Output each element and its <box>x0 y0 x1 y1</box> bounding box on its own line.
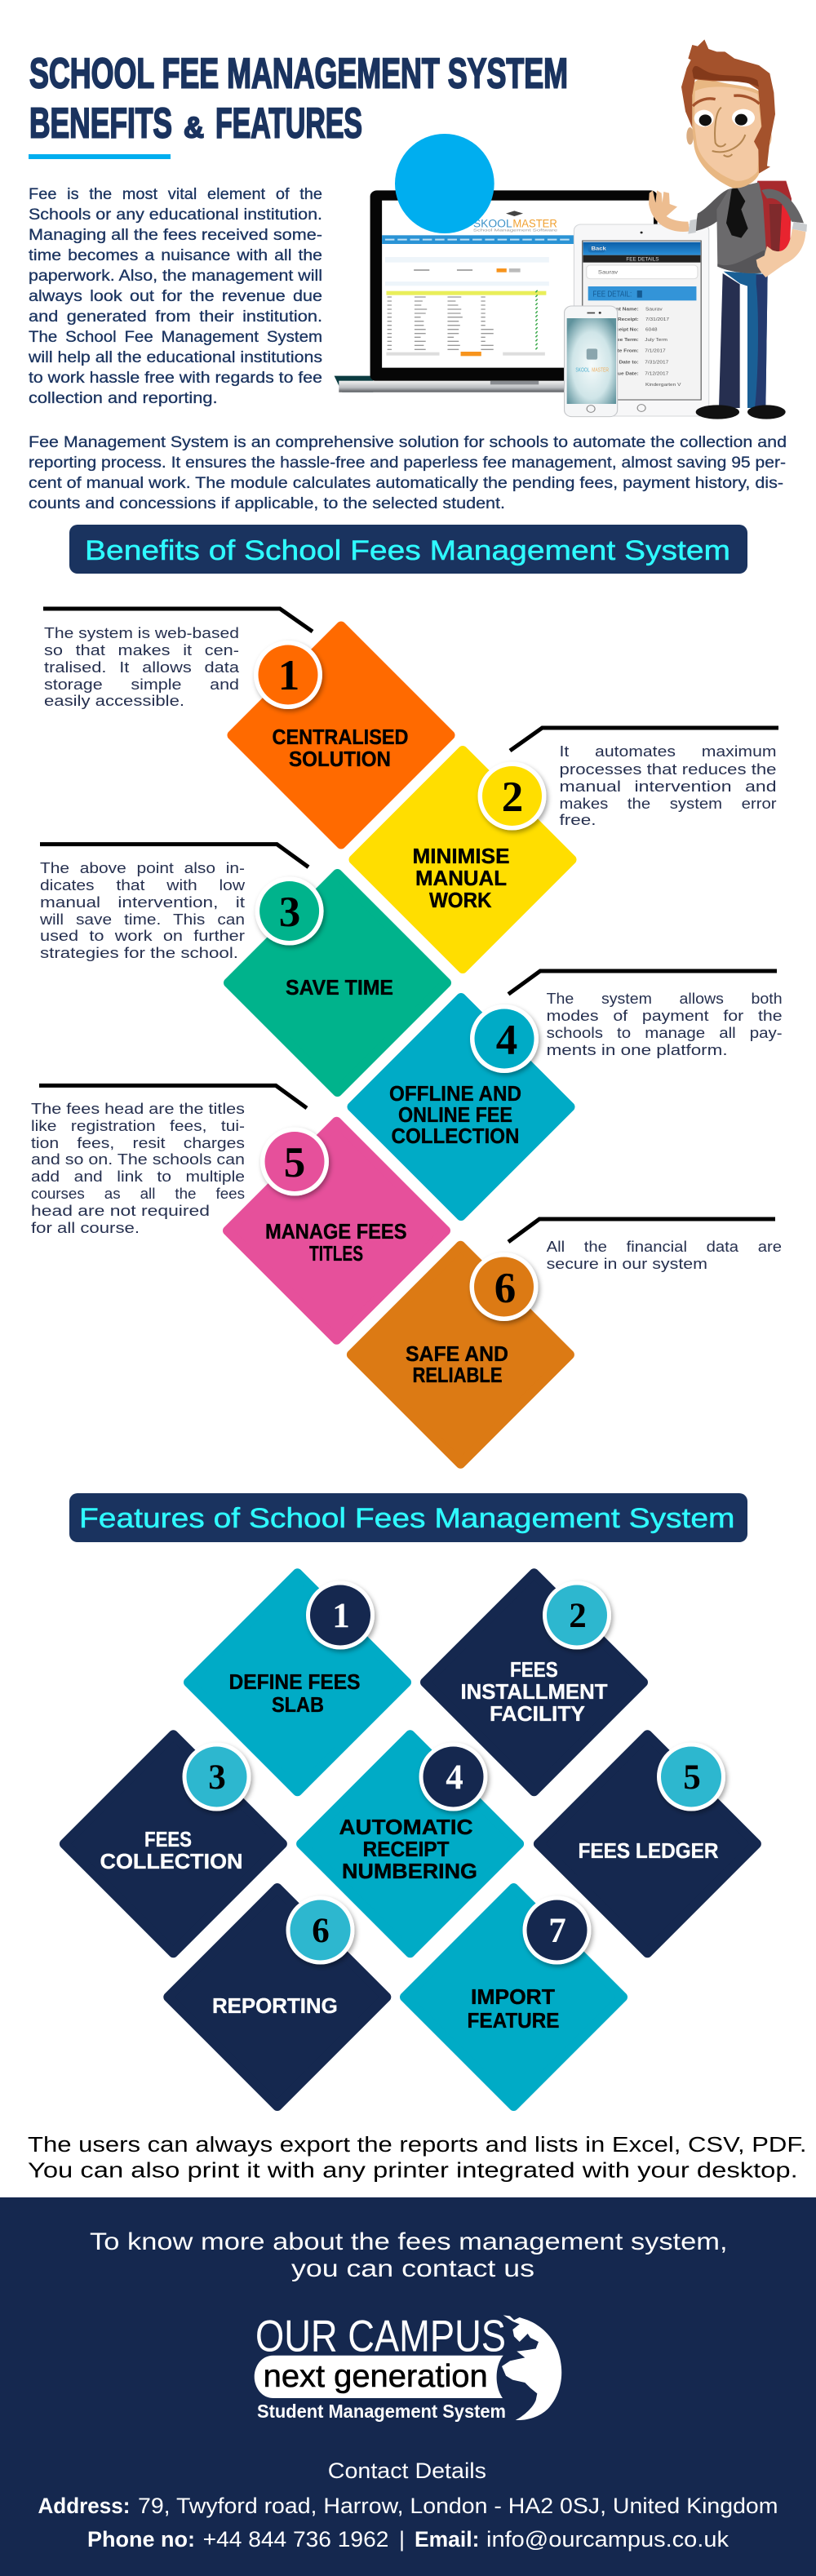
right arm <box>761 189 804 223</box>
footer call to action <box>90 2228 728 2282</box>
diamond 2 <box>354 751 571 969</box>
title <box>29 51 568 147</box>
feature badge 6: 6 <box>312 1912 330 1950</box>
contact details <box>38 2459 778 2552</box>
feature diamond 4 <box>301 1735 519 1953</box>
tablet: Back <box>591 246 606 252</box>
callout text 1: tralised. It allows data <box>44 659 240 676</box>
tablet detail rows: 7/12/2017 <box>645 371 669 376</box>
label 2: MINIMISE <box>413 845 509 868</box>
feature diamond 6 <box>168 1888 386 2106</box>
callout text 4: ments in one platform. <box>547 1042 728 1058</box>
benefit 5 <box>31 1085 446 1340</box>
callout text 4 <box>547 991 783 1058</box>
torso <box>716 182 768 273</box>
diamond 6 <box>352 1246 570 1464</box>
label 5: MANAGE FEES <box>265 1221 406 1244</box>
tablet detail rows: 7/31/2017 <box>645 317 670 322</box>
feature diamond 3 <box>64 1735 282 1953</box>
tablet detail rows: Date to: <box>619 360 639 366</box>
logo: our campus <box>255 2312 561 2422</box>
callout text 3: used to work on further <box>40 928 245 944</box>
label 3: SAVE TIME <box>286 977 393 1000</box>
feature badge 7 <box>522 1896 591 1965</box>
badge 3 <box>255 876 324 945</box>
benefit 2 <box>354 728 778 969</box>
feature 7 <box>405 1888 623 2106</box>
feature label 4: AUTOMATIC <box>339 1816 473 1839</box>
badge 5 <box>260 1128 329 1196</box>
hand on hip <box>756 229 805 277</box>
feature label 7: IMPORT <box>471 1986 555 2009</box>
feature diamond 1 <box>188 1573 406 1791</box>
diamond 4 <box>353 998 570 1216</box>
callout leader 2 <box>510 728 778 751</box>
callout text 3: will save time. This can <box>39 911 245 928</box>
tablet: FEE DETAIL: <box>592 290 632 299</box>
title: FEATURES <box>215 100 362 147</box>
intro paragraph: always look out for the revenue due <box>29 287 322 305</box>
feature badge 5 <box>657 1743 725 1811</box>
feature label 1: SLAB <box>272 1694 324 1717</box>
export note: You can also print it with any printer integrated with your desktop. <box>28 2159 798 2182</box>
phone <box>565 306 618 417</box>
laptop screen logo: School Management Software <box>473 228 557 233</box>
waving hand and forearm <box>649 190 690 232</box>
contact details: Phone no: <box>87 2527 195 2552</box>
feature label 6: REPORTING <box>212 1995 338 2018</box>
badge 2 <box>478 762 547 831</box>
feature label 7 <box>467 1986 560 2033</box>
label 4: OFFLINE AND <box>389 1083 521 1106</box>
benefit 6 <box>352 1219 782 1464</box>
badge 1 <box>254 641 322 709</box>
brows, nose and smile <box>693 95 760 106</box>
contact details: Contact Details <box>328 2459 486 2483</box>
export note: The users can always export the reports and lists in Excel, CSV, PDF. <box>28 2134 807 2157</box>
laptop data table <box>388 297 494 349</box>
feature badge 3 <box>183 1743 251 1811</box>
heading: benefits: Benefits of School Fees Management System <box>85 535 730 566</box>
feature 1 <box>188 1573 406 1791</box>
heading: benefits <box>69 525 747 574</box>
feature badge 1: 1 <box>332 1597 350 1635</box>
callout leader 4 <box>508 971 777 994</box>
feature badge 7: 7 <box>548 1912 566 1950</box>
tablet <box>574 224 709 416</box>
callout text 6: secure in our system <box>547 1256 707 1272</box>
shoes <box>695 405 787 419</box>
callout text 4: The system allows both <box>547 991 783 1007</box>
intro paragraph: to work hassle free with regards to fee <box>29 369 322 387</box>
label 1: CENTRALISED <box>273 726 408 749</box>
title underline <box>29 154 171 159</box>
intro paragraph: Schools or any educational institution. <box>29 206 322 224</box>
callout text 3: manual intervention, it <box>40 894 245 911</box>
tablet detail rows: eceipt No: <box>613 327 639 333</box>
feature badge 3: 3 <box>208 1758 226 1797</box>
badge 4 <box>470 1004 539 1073</box>
badge 1: 1 <box>278 652 299 699</box>
heading: features <box>69 1493 747 1542</box>
face <box>692 79 763 188</box>
label 1: SOLUTION <box>289 748 391 771</box>
intro paragraph: time becomes a nuisance with all the <box>29 246 322 264</box>
logo globe <box>502 2315 561 2420</box>
feature 5 <box>539 1735 756 1953</box>
feature badge 2 <box>543 1581 611 1650</box>
contact details: 79, Twyford road, Harrow, London - HA2 0SJ, United Kingdom <box>138 2494 778 2518</box>
badge 6 <box>470 1253 539 1321</box>
phone: SKOOL <box>575 366 590 374</box>
title: & <box>184 110 204 144</box>
callout text 4: schools to manage all pay- <box>547 1025 783 1041</box>
tablet detail rows: 7/1/2017 <box>645 348 666 354</box>
intro paragraph: will help all the educational institutions <box>28 348 322 366</box>
feature diamond 5 <box>539 1735 756 1953</box>
callout leader 1 <box>43 609 313 632</box>
feature label 3 <box>100 1829 243 1873</box>
benefit 3 <box>39 845 446 1092</box>
footer panel <box>0 2197 816 2576</box>
feature label 4: NUMBERING <box>342 1860 477 1883</box>
logo: our campus: next generation <box>264 2359 488 2394</box>
feature badge 6 <box>286 1896 354 1965</box>
feature badge 4: 4 <box>446 1758 463 1797</box>
contact details: +44 844 736 1962 <box>203 2527 388 2552</box>
callout text 1: The system is web-based <box>44 625 239 641</box>
label 4: COLLECTION <box>392 1125 519 1148</box>
intro paragraph: collection and reporting. <box>29 389 218 407</box>
callout text 1: storage simple and <box>44 676 239 693</box>
sleeve <box>695 189 729 231</box>
hair <box>681 39 775 174</box>
feature label 3: FEES <box>144 1829 192 1851</box>
hero illustration <box>335 39 807 419</box>
feature badge 1 <box>306 1581 375 1650</box>
callout leader 3 <box>40 845 308 867</box>
feature label 7: FEATURE <box>467 2010 560 2033</box>
feature badge 2: 2 <box>569 1597 587 1635</box>
title: SCHOOL FEE MANAGEMENT SYSTEM <box>29 51 568 98</box>
label 4 <box>389 1083 521 1148</box>
laptop <box>335 190 658 392</box>
description paragraph: Fee Management System is an comprehensive solution for schools to automate the collection and <box>29 433 787 451</box>
callout text 1: so that makes it cen- <box>44 642 239 658</box>
label 6: SAFE AND <box>406 1343 508 1366</box>
blue circle <box>395 134 494 233</box>
tablet detail rows: Fee Term: <box>614 337 639 343</box>
label 6 <box>406 1343 508 1387</box>
callout text 6 <box>547 1239 782 1272</box>
heading: features: Features of School Fees Management System <box>79 1503 734 1534</box>
feature label 2 <box>460 1659 608 1726</box>
callout text 5: add and link to multiple <box>31 1168 245 1185</box>
callout text 2: manual intervention and <box>560 778 777 795</box>
contact details: info@ourcampus.co.uk <box>486 2527 730 2552</box>
label 5 <box>265 1221 406 1266</box>
logo: our campus: Student Management System <box>257 2401 506 2422</box>
callout text 2 <box>560 743 777 828</box>
callout text 5: and so on. The schools can <box>31 1151 245 1168</box>
label 5: TITLES <box>309 1243 363 1266</box>
laptop screen logo <box>473 211 557 233</box>
footer call to action: To know more about the fees management system, <box>90 2228 728 2255</box>
description paragraph: cent of manual work. The module calculates automatically the pending fees, payment history, dis- <box>29 474 783 492</box>
callout text 5: courses as all the fees <box>31 1186 245 1202</box>
title: BENEFITS <box>29 100 172 147</box>
intro paragraph: paperwork. Also, the management will <box>29 267 322 285</box>
tablet detail rows: Saurav <box>645 307 663 313</box>
tablet detail rows: Due Date: <box>614 371 639 376</box>
feature diamond 7 <box>405 1888 623 2106</box>
benefit 4 <box>353 971 783 1216</box>
label 2 <box>413 845 509 912</box>
callout text 1: easily accessible. <box>44 693 184 709</box>
intro paragraph: Managing all the fees received some- <box>29 226 322 244</box>
callout text 5: head are not required <box>31 1203 210 1219</box>
tablet: Saurav <box>598 269 619 276</box>
tablet detail rows: dent Name: <box>610 307 639 313</box>
laptop screen logo: SKOOL <box>473 217 512 230</box>
tablet detail rows: of Receipt: <box>611 317 639 322</box>
callout text 3: The above point also in- <box>40 860 245 876</box>
description paragraph: reporting process. It ensures the hassle-free and paperless fee management, almost saving 95 per- <box>29 454 786 472</box>
export note <box>28 2134 807 2182</box>
tablet detail rows: 7/31/2017 <box>645 360 669 366</box>
badge 5: 5 <box>284 1139 305 1186</box>
feature label 1: DEFINE FEES <box>228 1671 361 1694</box>
eyes <box>694 109 755 126</box>
logo: our campus: OUR CAMPUS <box>255 2312 506 2361</box>
logo pill <box>255 2356 503 2398</box>
feature badge 4 <box>419 1743 488 1811</box>
tablet detail rows: Date From: <box>610 348 639 354</box>
intro paragraph: The School Fee Management System <box>29 328 322 346</box>
label 2: MANUAL <box>415 867 507 890</box>
description paragraph <box>29 433 787 512</box>
footer call to action: you can contact us <box>291 2255 534 2282</box>
tablet detail rows: July Term <box>645 337 667 343</box>
badge 6: 6 <box>494 1265 516 1312</box>
callout text 3: strategies for the school. <box>40 945 238 961</box>
label 1 <box>273 726 408 771</box>
diamond 5 <box>228 1122 446 1340</box>
feature label 2: FACILITY <box>490 1703 585 1726</box>
callout text 5: like registration fees, tui- <box>31 1118 245 1134</box>
badge 3: 3 <box>279 889 300 936</box>
intro paragraph <box>28 185 322 407</box>
feature diamond 2 <box>425 1573 643 1791</box>
callout text 5: tion fees, resit charges <box>31 1135 245 1151</box>
contact details: Email: <box>415 2527 479 2552</box>
callout text 4: modes of payment for the <box>547 1008 783 1024</box>
callout text 5 <box>31 1101 245 1236</box>
tie <box>726 188 748 238</box>
diamond 3 <box>228 874 446 1092</box>
feature 2 <box>425 1573 643 1791</box>
legs <box>719 272 768 408</box>
character <box>649 39 807 419</box>
tablet detail rows: 6048 <box>645 327 658 333</box>
tablet detail rows: Kindergarten V <box>645 382 681 388</box>
contact details: | <box>399 2527 405 2552</box>
contact details: Address: <box>38 2494 130 2518</box>
intro paragraph: Fee is the most vital element of the <box>29 185 322 203</box>
phone: MASTER <box>592 366 609 374</box>
feature label 4 <box>339 1816 477 1883</box>
feature label 2: FEES <box>510 1659 558 1682</box>
tablet detail rows <box>610 307 681 388</box>
callout text 2: free. <box>560 812 596 828</box>
ears <box>686 126 772 149</box>
feature label 1 <box>228 1671 361 1717</box>
callout text 6: All the financial data are <box>547 1239 782 1255</box>
callout text 2: makes the system error <box>560 796 777 812</box>
feature label 3: COLLECTION <box>100 1851 243 1873</box>
callout text 2: processes that reduces the <box>560 761 777 778</box>
callout text 3 <box>39 860 246 961</box>
label 2: WORK <box>429 889 492 912</box>
feature label 2: INSTALLMENT <box>460 1681 608 1704</box>
feature 6 <box>168 1888 386 2106</box>
backpack <box>753 181 792 255</box>
feature 4 <box>301 1735 519 1953</box>
feature 3 <box>64 1735 282 1953</box>
callout leader 5 <box>39 1085 307 1108</box>
callout leader 6 <box>508 1219 775 1242</box>
feature label 4: RECEIPT <box>362 1838 450 1861</box>
callout text 5: The fees head are the titles <box>31 1101 245 1117</box>
intro paragraph: and generated from their institution. <box>29 308 322 326</box>
benefit 1 <box>43 609 450 844</box>
description paragraph: counts and concessions if applicable, to the selected student. <box>29 494 505 512</box>
callout text 2: It automates maximum <box>560 743 777 760</box>
diamond 1 <box>232 627 450 844</box>
badge 4: 4 <box>496 1017 517 1064</box>
label 6: RELIABLE <box>413 1364 503 1387</box>
badge 2: 2 <box>502 774 523 821</box>
callout text 5: for all course. <box>31 1220 140 1236</box>
tablet: FEE DETAILS <box>626 257 659 262</box>
callout text 3: dicates that with low <box>40 877 246 893</box>
feature badge 5: 5 <box>683 1758 701 1797</box>
callout text 1 <box>44 625 240 709</box>
label 4: ONLINE FEE <box>398 1104 512 1127</box>
feature label 5: FEES LEDGER <box>578 1840 718 1863</box>
devices <box>335 134 709 417</box>
laptop screen logo: MASTER <box>512 217 557 230</box>
